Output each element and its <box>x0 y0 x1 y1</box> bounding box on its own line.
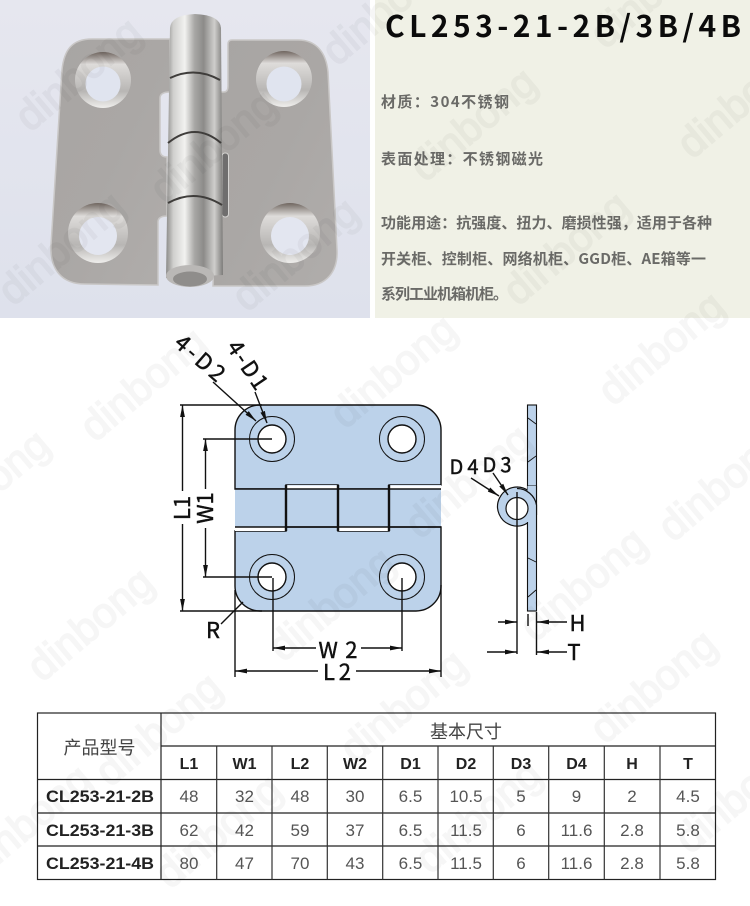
row: CL253-21-3B: 6 <box>516 821 526 840</box>
header: basic dimensions: 基本尺寸 <box>430 718 502 744</box>
row: CL253-21-3B: 11.5 <box>450 821 482 840</box>
row: CL253-21-2B: 48 <box>180 787 198 806</box>
watermarks: dinbong <box>494 182 638 314</box>
label D4 <box>450 451 499 496</box>
column headers: L1 <box>180 756 198 773</box>
barrel grooves <box>168 72 222 205</box>
technical drawing: front view <box>165 326 442 687</box>
row: CL253-21-3B: CL253-21-3B <box>46 821 154 840</box>
label R <box>206 602 243 645</box>
row: CL253-21-2B: 4.5 <box>676 787 700 806</box>
specification table <box>38 713 716 880</box>
watermarks: dinbong <box>511 518 655 650</box>
label R: R <box>206 613 220 645</box>
row: CL253-21-4B: CL253-21-4B <box>46 854 154 873</box>
row: CL253-21-2B: CL253-21-2B <box>46 787 154 806</box>
row: CL253-21-3B: 11.6 <box>561 821 592 840</box>
watermarks: dinbong <box>581 620 725 752</box>
surface treatment: 表面处理：不锈钢磁光 <box>381 148 543 169</box>
label 4-D2 <box>168 326 256 421</box>
barrel end cap <box>166 265 214 287</box>
watermarks: dinbong <box>146 765 290 897</box>
row: CL253-21-4B: 70 <box>291 854 309 873</box>
label 4-D1 <box>220 333 277 423</box>
hinge hole bottom right <box>260 203 320 263</box>
watermarks: dinbong <box>589 282 733 414</box>
lower plate <box>235 527 441 611</box>
row: CL253-21-3B <box>46 821 700 840</box>
row: CL253-21-4B: 47 <box>235 854 254 873</box>
watermarks: dinbong <box>401 58 545 190</box>
column headers: H <box>626 756 638 773</box>
row: CL253-21-2B: 6.5 <box>399 787 422 806</box>
row: CL253-21-2B: 2 <box>627 787 637 806</box>
side plate <box>528 405 536 611</box>
row: CL253-21-4B: 5.8 <box>676 854 700 873</box>
technical drawing: side view <box>450 405 586 667</box>
table grid <box>38 713 716 880</box>
dimension H <box>498 606 586 655</box>
watermarks: dinbong <box>223 188 367 320</box>
watermarks: dinbong <box>6 8 150 140</box>
column headers: D2 <box>456 756 476 773</box>
hinge hole bottom left <box>68 203 128 263</box>
dimension W1 <box>188 439 272 577</box>
watermarks: dinbong <box>321 305 465 437</box>
row: CL253-21-3B: 6.5 <box>399 821 422 840</box>
row: CL253-21-2B: 9 <box>572 787 581 806</box>
watermarks: dinbong <box>406 750 550 882</box>
dimension T <box>487 635 581 667</box>
dimension T: T <box>567 635 581 667</box>
column headers: W1 <box>232 756 257 773</box>
row: CL253-21-3B: 42 <box>235 821 254 840</box>
column headers <box>180 756 693 773</box>
photo panel: stainless steel hinge <box>0 0 370 318</box>
row: CL253-21-4B: 11.5 <box>450 854 482 873</box>
watermarks: dinbong <box>141 80 285 212</box>
usage description: 系列工业机箱机柜。 <box>381 283 508 304</box>
column headers: D4 <box>566 756 587 773</box>
hinge left leaf <box>51 39 170 285</box>
dimension L2: L2 <box>323 655 351 687</box>
watermarks: dinbong <box>86 663 230 795</box>
row: CL253-21-3B: 5.8 <box>676 821 700 840</box>
column headers: D1 <box>400 756 421 773</box>
label 4-D1: 4-D1 <box>220 333 277 396</box>
dimension W1: W1 <box>188 492 220 524</box>
hinge right leaf <box>213 40 337 286</box>
hinge barrel <box>166 14 223 278</box>
row: CL253-21-4B: 6.5 <box>399 854 422 873</box>
dimension H: H <box>569 606 586 638</box>
row: CL253-21-3B: 62 <box>180 821 198 840</box>
column headers: T <box>683 756 693 773</box>
label D3: D3 <box>482 449 512 478</box>
header: model: 产品型号 <box>64 734 136 760</box>
label 4-D2: 4-D2 <box>168 326 233 388</box>
watermarks: dinbong <box>71 318 215 450</box>
hinge plate <box>235 405 441 489</box>
row: CL253-21-4B: 6 <box>516 854 526 873</box>
hinge knuckles <box>235 485 441 527</box>
row: CL253-21-4B: 43 <box>346 854 364 873</box>
row: CL253-21-2B: 30 <box>346 787 364 806</box>
row: CL253-21-2B: 32 <box>235 787 254 806</box>
row: CL253-21-2B: 5 <box>516 787 526 806</box>
row: CL253-21-2B <box>46 787 700 806</box>
dimension W2: W2 <box>318 633 358 665</box>
row: CL253-21-2B: 48 <box>291 787 309 806</box>
watermarks: dinbong <box>331 640 475 772</box>
watermarks: dinbong <box>259 538 403 670</box>
hinge hole top left <box>75 52 131 108</box>
hinge hole top right <box>256 51 312 107</box>
title: CL253-21-2B/3B/4B <box>385 2 741 46</box>
row: CL253-21-3B: 2.8 <box>620 821 644 840</box>
material: 材质：304不锈钢 <box>381 91 509 112</box>
row: CL253-21-4B: 80 <box>180 854 198 873</box>
barrel loop <box>498 486 536 530</box>
panel: product specification <box>375 0 750 318</box>
usage description: 功能用途：抗强度、扭力、磨损性强，适用于各种 <box>381 212 712 233</box>
hinge right slot <box>222 153 228 217</box>
column headers: L2 <box>291 756 309 773</box>
mounting holes <box>250 416 424 600</box>
column headers: W2 <box>343 756 367 773</box>
row: CL253-21-2B: 10.5 <box>449 787 483 806</box>
watermarks: dinbong <box>18 558 162 690</box>
row: CL253-21-4B: 11.6 <box>561 854 592 873</box>
label D4: D4 <box>450 451 478 480</box>
usage description: 开关柜、控制柜、网络机柜、GGD柜、AE箱等一 <box>381 248 706 269</box>
row: CL253-21-4B <box>46 854 700 873</box>
hinge gaps <box>235 485 442 531</box>
dimension L1 <box>165 405 262 611</box>
dimension L2 <box>235 585 441 687</box>
row: CL253-21-3B: 37 <box>346 821 364 840</box>
centre line <box>516 492 518 654</box>
column headers: D3 <box>511 756 531 773</box>
row: CL253-21-4B: 2.8 <box>620 854 644 873</box>
row: CL253-21-3B: 59 <box>291 821 309 840</box>
dimension W2 <box>273 578 402 665</box>
dimension L1: L1 <box>165 496 197 520</box>
usage description <box>381 212 712 304</box>
label D3 <box>482 449 512 495</box>
watermarks: dinbong <box>396 415 540 547</box>
